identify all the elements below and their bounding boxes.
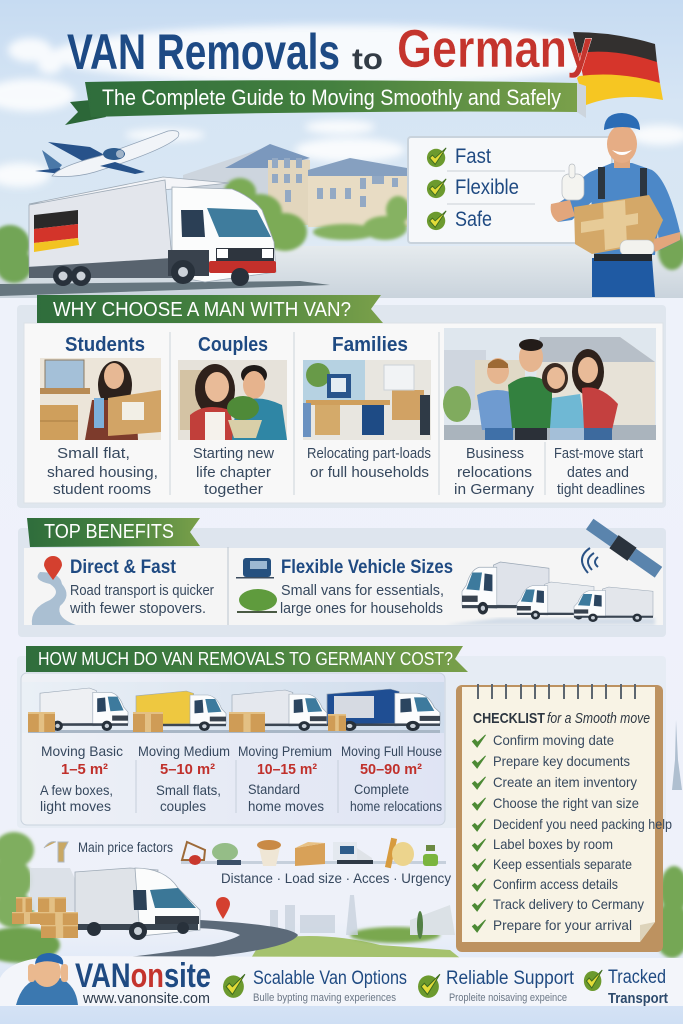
checklist heading: CHECKLIST xyxy=(473,710,545,727)
tier: moving full house: 50–90 m² xyxy=(360,761,422,778)
feature: scalable van options: Bulle bypting maving experiences xyxy=(253,992,396,1004)
tier: moving premium xyxy=(229,690,332,814)
main price factors: Main price factors xyxy=(78,840,173,855)
father xyxy=(508,339,552,440)
heading ribbon: HOW MUCH DO VAN REMOVALS TO GERMANY COST? xyxy=(38,649,453,669)
truck flag xyxy=(34,210,79,252)
straps xyxy=(598,167,605,199)
text: direct and fast: Road transport is quicker xyxy=(70,583,214,599)
checklist notepad xyxy=(456,684,672,952)
icon: green scale xyxy=(423,845,438,866)
girl xyxy=(542,363,586,440)
tier: moving medium xyxy=(133,691,230,814)
tier: moving medium: Moving Medium xyxy=(138,743,230,759)
card: couples: life chapter xyxy=(196,464,271,481)
main price factors xyxy=(44,838,451,886)
card: students: Small flat, xyxy=(57,445,130,462)
section: top benefits xyxy=(18,518,666,637)
feature: tracked transport: Transport xyxy=(608,990,668,1007)
checklist heading xyxy=(473,710,650,727)
checklist heading: for a Smooth move xyxy=(547,710,650,727)
feature: reliable support: Reliable Support xyxy=(446,968,575,989)
tier: moving basic xyxy=(28,688,128,814)
text: flexible vehicle sizes xyxy=(280,557,453,617)
card: couples: Couples xyxy=(198,334,268,356)
card: families: or full households xyxy=(310,464,429,481)
vehicles group xyxy=(445,562,655,625)
checklist items: Prepare key documents xyxy=(493,753,630,769)
tier: moving full house: Complete xyxy=(354,781,409,797)
checklist items: Confirm moving date xyxy=(493,732,614,748)
neck xyxy=(614,156,630,168)
tier: moving full house: home relocations xyxy=(350,798,442,814)
text: flexible vehicle sizes: large ones for households xyxy=(280,601,443,617)
card: business relocations xyxy=(454,445,535,498)
feature: scalable van options xyxy=(223,968,407,1004)
panel: fast flexible safe xyxy=(408,137,612,243)
section: cost xyxy=(17,646,666,828)
subtitle ribbon: The Complete Guide to Moving Smoothly and Safely xyxy=(102,85,561,110)
logo: www.vanonsite.com xyxy=(82,991,210,1007)
tier: moving basic: Moving Basic xyxy=(41,743,123,759)
checklist items: Create an item inventory xyxy=(493,774,637,790)
card: fast-move dates: tight deadlines xyxy=(557,481,645,498)
icon: plant tray xyxy=(212,843,241,865)
text: direct and fast: with fewer stopovers. xyxy=(69,601,206,617)
icon: scale xyxy=(182,842,205,865)
section: why choose a man with van xyxy=(17,295,666,508)
title: to xyxy=(352,43,383,76)
German flag xyxy=(573,32,663,105)
icon: airplane xyxy=(35,131,179,176)
icon: map pin xyxy=(44,556,62,580)
tier: moving premium: 10–15 m² xyxy=(257,761,317,778)
spiral rings xyxy=(478,684,635,699)
buildings background xyxy=(183,144,410,252)
sky clouds xyxy=(0,25,683,187)
left arm xyxy=(552,172,596,222)
card: business relocations: in Germany xyxy=(454,481,535,498)
right trees xyxy=(658,230,683,270)
tier: moving basic: light moves xyxy=(40,798,111,814)
families illustration xyxy=(303,360,431,440)
subtitle ribbon xyxy=(65,80,586,125)
couples illustration xyxy=(178,360,287,440)
trousers xyxy=(592,258,655,297)
icon: van front xyxy=(236,558,274,578)
checklist items: Track delivery to Cermany xyxy=(493,896,644,912)
landscape with road xyxy=(0,720,683,963)
feature: reliable support: Propleite noisaving expeince xyxy=(449,992,567,1004)
checklist items: Confirm access details xyxy=(493,876,618,892)
text: flexible vehicle sizes: Small vans for essentials, xyxy=(281,583,444,599)
card: fast-move dates: dates and xyxy=(567,464,629,481)
icon: winding road xyxy=(32,572,76,625)
tier: moving full house xyxy=(327,689,442,814)
glove thumb xyxy=(562,174,584,200)
ground and road xyxy=(0,225,683,298)
boy xyxy=(477,358,518,440)
tier: moving premium: Moving Premium xyxy=(238,743,332,759)
feature: tracked transport: Tracked xyxy=(608,967,666,988)
feature: reliable support xyxy=(418,968,575,1004)
left mini icon xyxy=(44,842,68,862)
text: flexible vehicle sizes: Flexible Vehicle Sizes xyxy=(281,557,453,578)
icon: map pin on road xyxy=(216,897,230,919)
text: direct and fast: Direct & Fast xyxy=(70,557,177,578)
students illustration xyxy=(40,358,161,440)
heading ribbon xyxy=(27,518,200,547)
check items: Fast xyxy=(455,145,491,168)
tier: moving medium: 5–10 m² xyxy=(160,761,215,778)
card: families xyxy=(303,334,431,481)
mascot avatar xyxy=(16,953,78,1005)
check items: Flexible xyxy=(455,176,519,199)
icon: box xyxy=(295,842,325,866)
icon: bush xyxy=(237,589,277,613)
checklist items: Label boxes by room xyxy=(493,836,613,852)
heading ribbon: TOP BENEFITS xyxy=(44,521,174,543)
right arm xyxy=(652,170,680,250)
title: Germany xyxy=(397,19,592,79)
check items: Safe xyxy=(455,208,492,231)
footer band xyxy=(0,953,683,1007)
feature: scalable van options: Scalable Van Options xyxy=(253,968,407,989)
checklist items: Prepare for your arrival xyxy=(493,917,632,933)
tier: moving premium: home moves xyxy=(248,798,324,814)
title: VAN Removals xyxy=(67,24,340,80)
tier: moving full house: Moving Full House xyxy=(341,743,442,759)
check items xyxy=(427,145,519,231)
checklist items: Choose the right van size xyxy=(493,795,639,811)
icon: satellite xyxy=(582,518,663,579)
card: families: Relocating part-loads xyxy=(307,445,431,462)
card: families: Families xyxy=(332,334,408,356)
left trees xyxy=(0,225,32,283)
card: couples xyxy=(178,334,287,498)
stacked boxes xyxy=(12,897,78,938)
delivery man with box xyxy=(551,113,680,297)
truck with German flag xyxy=(29,177,276,286)
card: students: student rooms xyxy=(53,481,151,498)
tier: moving medium: Small flats, xyxy=(156,782,221,798)
icon: bowl xyxy=(257,840,281,866)
icon: brush and palette xyxy=(385,838,414,868)
mother xyxy=(572,349,618,440)
tier: moving basic: 1–5 m² xyxy=(61,761,108,778)
card: couples: Starting new xyxy=(193,445,274,462)
large moving truck xyxy=(12,868,200,940)
card: business relocations: Business xyxy=(466,445,524,462)
card: fast-move dates xyxy=(554,445,645,498)
logo: VANonsite xyxy=(75,957,211,995)
main price factors: Distance · Load size · Acces · Urgency xyxy=(221,870,451,886)
icon: van xyxy=(333,842,373,864)
tier: moving premium: Standard xyxy=(248,781,300,797)
title xyxy=(67,19,592,80)
checklist items xyxy=(472,732,672,933)
heading ribbon: WHY CHOOSE A MAN WITH VAN? xyxy=(53,299,351,321)
card: students xyxy=(40,334,161,498)
torso xyxy=(590,163,662,255)
tier: moving basic: A few boxes, xyxy=(40,782,113,798)
feature: tracked transport xyxy=(584,967,668,1007)
card: fast-move dates: Fast-move start xyxy=(554,445,644,462)
tier: moving medium: couples xyxy=(160,798,206,814)
card: couples: together xyxy=(204,481,263,498)
checklist items: Keep essentials separate xyxy=(493,856,632,872)
card: students: Students xyxy=(65,334,145,356)
text: direct and fast xyxy=(69,557,214,617)
tower xyxy=(672,720,682,790)
family photo illustration xyxy=(443,328,656,440)
card: business relocations: relocations xyxy=(457,464,532,481)
card: students: shared housing, xyxy=(47,464,158,481)
